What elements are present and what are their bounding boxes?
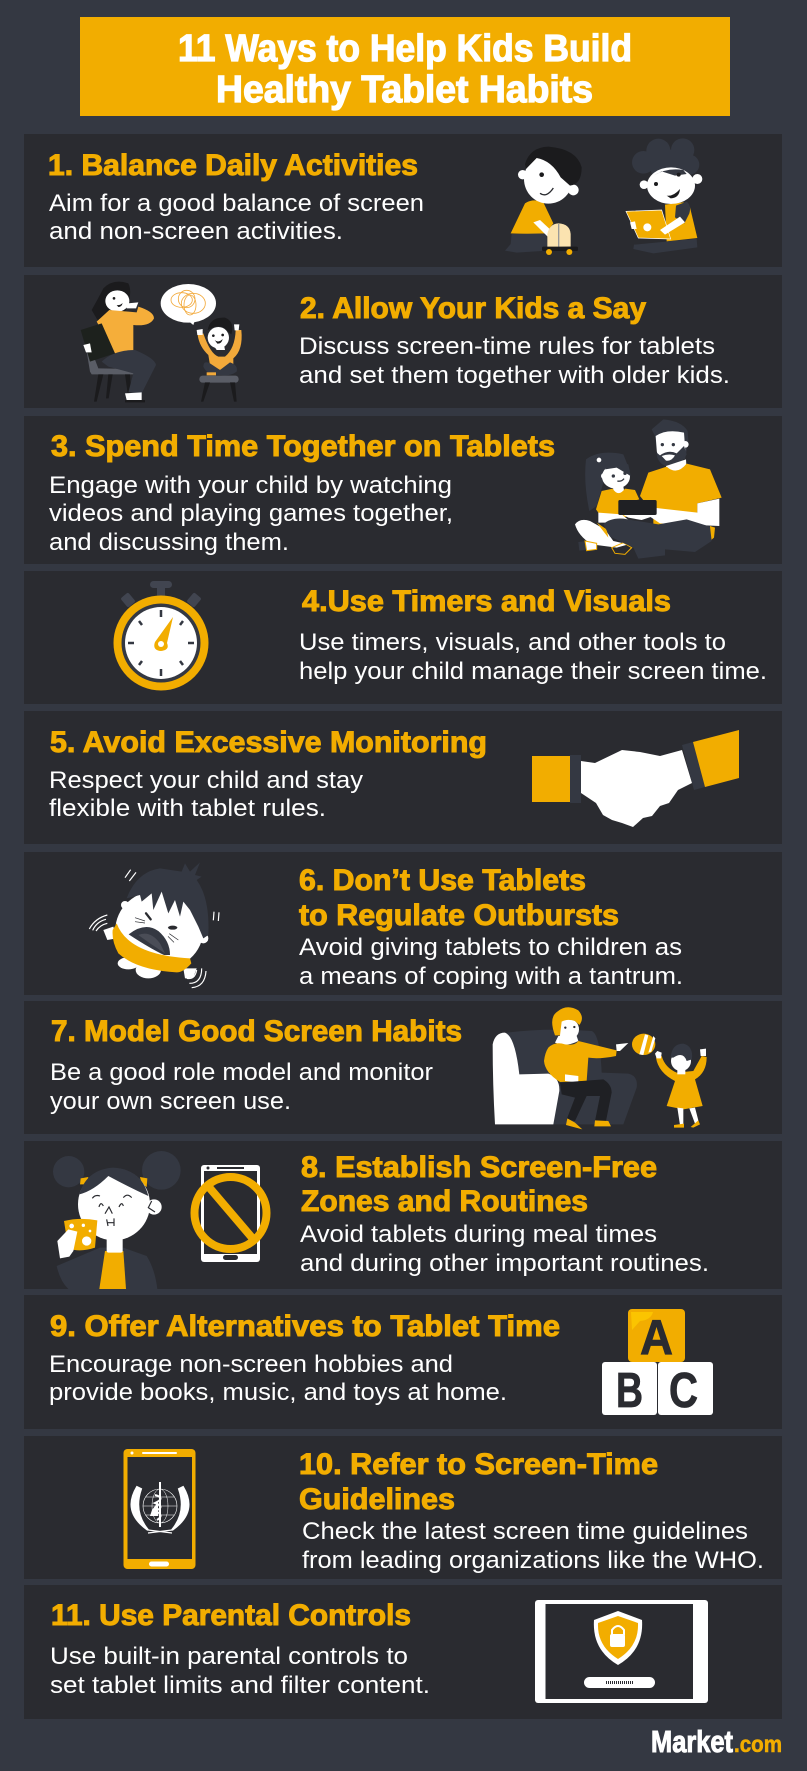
text block 1: and non-screen activities. <box>49 218 343 245</box>
text block 4: help your child manage their screen time. <box>299 658 767 685</box>
text block 4 <box>299 629 767 685</box>
text block 10 <box>302 1518 764 1574</box>
text block 2 <box>299 333 730 389</box>
text block 1 <box>49 190 424 245</box>
text block 6: a means of coping with a tantrum. <box>299 963 683 990</box>
panel: 8 establish screen-free zones <box>24 1141 782 1289</box>
panel: 2 allow your kids a say <box>24 275 782 408</box>
panel: 7 model good screen habits <box>24 1001 782 1134</box>
panel: 6 don't use tablets to regulate outbursts <box>24 852 782 995</box>
icon: phone with WHO emblem <box>124 1449 196 1569</box>
heading 4: 4.Use Timers and Visuals <box>302 585 671 618</box>
text block 2: and set them together with older kids. <box>299 362 730 389</box>
heading 6: 6. Don’t Use Tablets <box>299 864 586 897</box>
text block 3: videos and playing games together, <box>49 500 453 527</box>
icon: alphabet blocks: A <box>640 1311 673 1365</box>
panel: 9 offer alternatives <box>24 1295 782 1429</box>
text block 5: flexible with tablet rules. <box>49 795 326 822</box>
text block 11 <box>50 1643 430 1699</box>
text block 2: Discuss screen-time rules for tablets <box>299 333 715 360</box>
icon: alphabet blocks <box>602 1309 713 1418</box>
heading 10: Guidelines <box>299 1483 455 1516</box>
heading 6 <box>299 864 619 932</box>
text block 3: and discussing them. <box>49 529 289 556</box>
title banner: 11 Ways to Help Kids Build <box>178 28 632 70</box>
logo: Market.com: .com <box>734 1731 782 1757</box>
heading 6: to Regulate Outbursts <box>299 899 619 932</box>
panel: 1 balance daily activities <box>24 134 782 267</box>
title banner: Healthy Tablet Habits <box>216 69 593 111</box>
heading 8 <box>301 1151 657 1218</box>
panel: 10 refer to screen-time guidelines <box>24 1436 782 1579</box>
text block 4: Use timers, visuals, and other tools to <box>299 629 726 656</box>
text block 8: and during other important routines. <box>300 1250 709 1277</box>
heading 8: 8. Establish Screen-Free <box>301 1151 657 1184</box>
text block 3 <box>49 472 453 556</box>
icon: phone with prohibition sign <box>194 1165 266 1262</box>
icon: handshake <box>532 730 739 827</box>
heading 11: 11. Use Parental Controls <box>51 1599 411 1632</box>
panel: 3 spend time together <box>24 416 782 564</box>
heading 8: Zones and Routines <box>301 1185 588 1218</box>
icon: tablet with shield lock <box>535 1600 708 1703</box>
icon: girl drinking <box>53 1151 181 1289</box>
heading 2: 2. Allow Your Kids a Say <box>300 292 647 325</box>
icon: parent in armchair with child and ball <box>493 1007 707 1129</box>
title banner <box>80 17 730 116</box>
heading 3: 3. Spend Time Together on Tablets <box>51 430 555 463</box>
icon: mother and child talking <box>81 282 242 402</box>
heading 7: 7. Model Good Screen Habits <box>51 1015 462 1048</box>
icon: alphabet blocks: C <box>669 1364 698 1418</box>
text block 7: Be a good role model and monitor <box>50 1059 433 1086</box>
text block 7 <box>50 1059 433 1115</box>
text block 9: Encourage non-screen hobbies and <box>49 1351 453 1378</box>
panel: 4 use timers and visuals <box>24 571 782 704</box>
text block 6 <box>299 934 683 990</box>
icon: crying child tantrum <box>89 862 219 988</box>
text block 11: set tablet limits and filter content. <box>50 1672 430 1699</box>
text block 5: Respect your child and stay <box>49 767 363 794</box>
text block 10: Check the latest screen time guidelines <box>302 1518 748 1545</box>
icon: stopwatch <box>114 581 208 690</box>
text block 10: from leading organizations like the WHO. <box>302 1547 764 1574</box>
text block 8: Avoid tablets during meal times <box>300 1221 657 1248</box>
heading 5: 5. Avoid Excessive Monitoring <box>50 726 487 759</box>
text block 6: Avoid giving tablets to children as <box>299 934 682 961</box>
heading 10 <box>299 1448 658 1516</box>
heading 10: 10. Refer to Screen-Time <box>299 1448 658 1481</box>
heading 1: 1. Balance Daily Activities <box>48 149 418 182</box>
text block 9 <box>49 1351 507 1406</box>
text block 3: Engage with your child by watching <box>49 472 452 499</box>
logo: Market.com: Market <box>651 1724 733 1759</box>
text block 1: Aim for a good balance of screen <box>49 190 424 217</box>
text block 11: Use built-in parental controls to <box>50 1643 408 1670</box>
heading 9: 9. Offer Alternatives to Tablet Time <box>50 1310 560 1343</box>
panel: 5 avoid excessive monitoring <box>24 711 782 844</box>
icon: alphabet blocks: B <box>616 1364 643 1418</box>
text block 5 <box>49 767 363 822</box>
icon: father and daughter with tablet <box>575 419 722 559</box>
icon: two kids with toy and tablet <box>505 138 702 255</box>
panel: 11 use parental controls <box>24 1585 782 1719</box>
WHO emblem <box>132 1482 188 1533</box>
text block 8 <box>300 1221 709 1277</box>
text block 7: your own screen use. <box>50 1088 291 1115</box>
text block 9: provide books, music, and toys at home. <box>49 1379 507 1406</box>
